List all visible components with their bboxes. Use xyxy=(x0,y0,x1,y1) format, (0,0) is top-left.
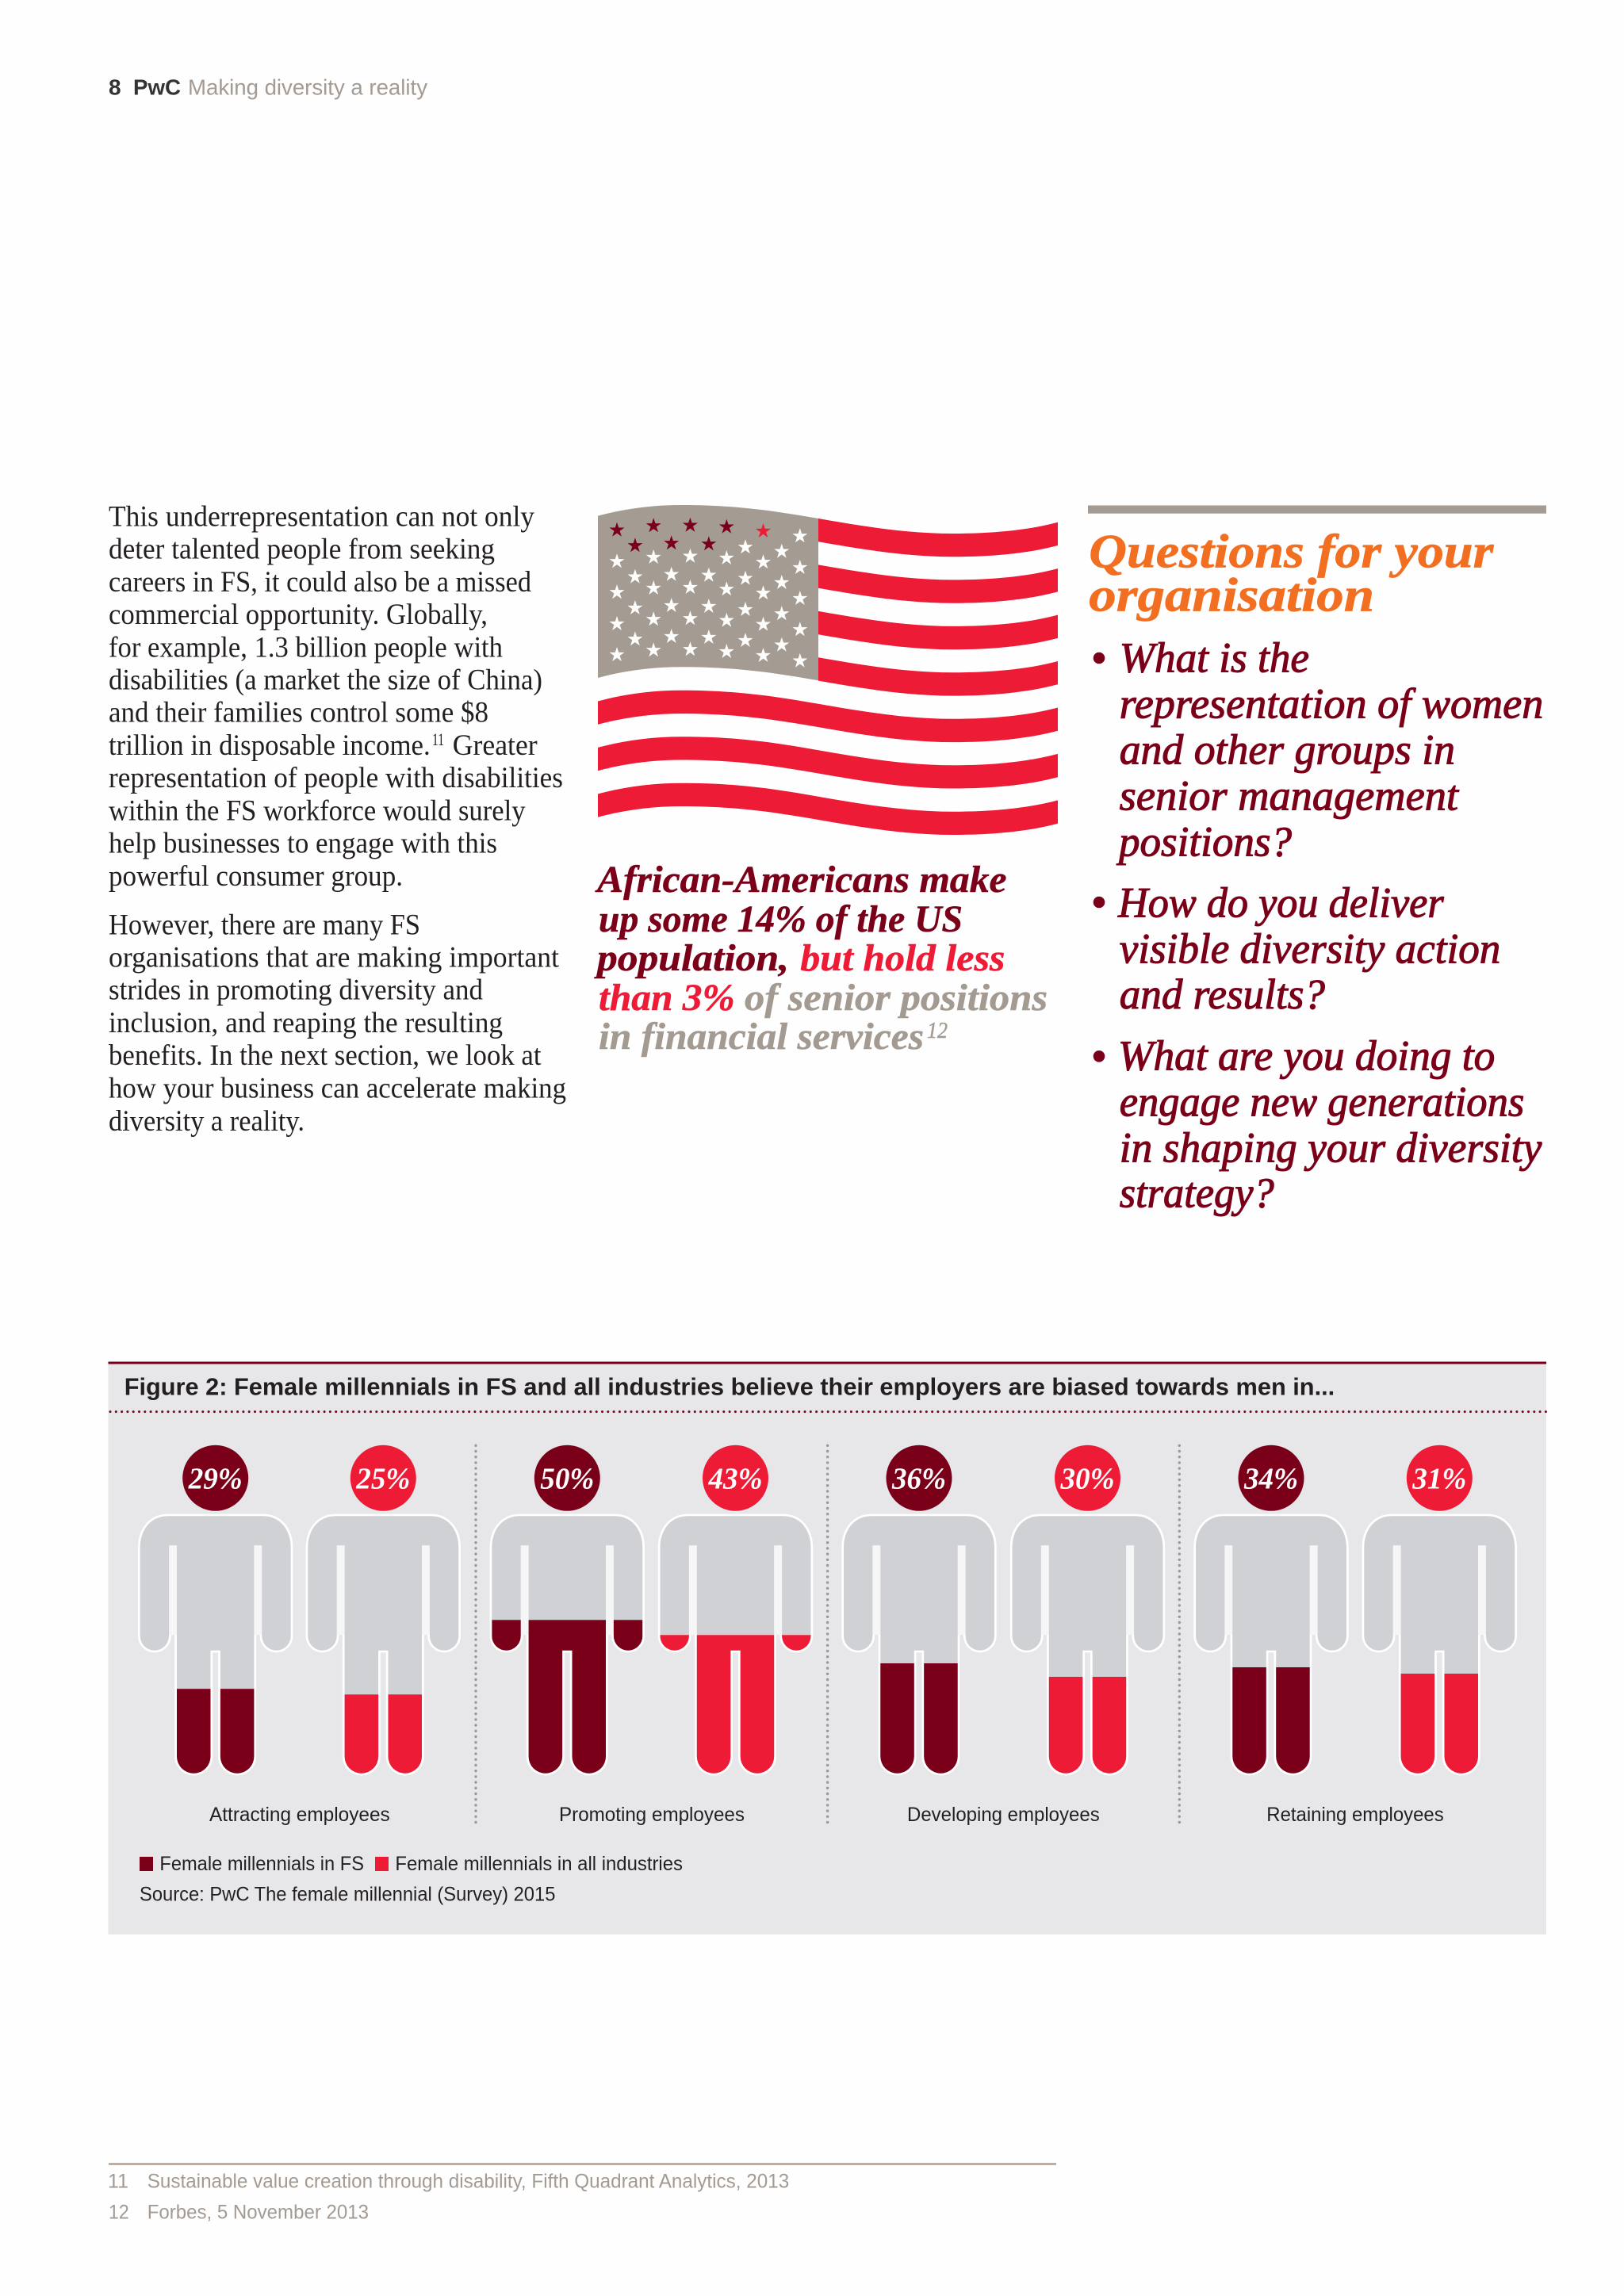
body text: second paragraph: diversity a reality. xyxy=(109,1104,304,1137)
callout: African-American statistic: African-Americans make xyxy=(595,859,1007,901)
callout: African-American statistic xyxy=(594,859,1048,1058)
pictogram: developing, all industries 30%: 30% xyxy=(1060,1462,1115,1495)
flag canton xyxy=(598,505,818,680)
body text: first paragraph: help businesses to engage with this xyxy=(109,827,497,859)
body text: first paragraph: representation of people with disabilities xyxy=(109,761,563,794)
legend: Female millennials in FS xyxy=(159,1853,364,1875)
body text: first paragraph: commercial opportunity. Globally, xyxy=(109,598,488,630)
question 3: What are you doing to xyxy=(1118,1032,1495,1080)
question 1: and other groups in xyxy=(1120,726,1455,774)
body text: second paragraph: benefits. In the next section, we look at xyxy=(109,1039,541,1071)
callout: African-American statistic: 12 xyxy=(927,1018,948,1043)
question 1: positions? xyxy=(1116,817,1292,865)
body text: second paragraph: inclusion, and reaping the resulting xyxy=(109,1006,503,1039)
pictogram: promoting, all industries 43%: 43% xyxy=(708,1462,763,1495)
category labels: Promoting employees xyxy=(559,1804,745,1826)
callout: African-American statistic: in financial services xyxy=(599,1016,924,1058)
icon: waving US flag xyxy=(598,505,1058,835)
callout: African-American statistic: than 3% xyxy=(599,977,735,1019)
question 1: senior management xyxy=(1120,772,1460,820)
body text: first paragraph: for example, 1.3 billion people with xyxy=(109,630,503,663)
callout: African-American statistic: population, xyxy=(594,937,789,979)
callout: African-American statistic: of senior positions xyxy=(745,977,1048,1019)
category labels: Attracting employees xyxy=(209,1804,390,1826)
question 1 xyxy=(1094,634,1543,865)
pictogram: attracting, all industries 25% xyxy=(304,1445,462,1789)
footnotes xyxy=(108,2163,1056,2223)
page header: Making diversity a reality xyxy=(188,75,427,100)
footnotes: 12 xyxy=(109,2201,129,2223)
pictogram: developing, all industries 30% xyxy=(1009,1445,1167,1780)
body text: second paragraph xyxy=(109,908,566,1137)
callout: African-American statistic: but hold less xyxy=(800,937,1005,979)
question 3: engage new generations xyxy=(1120,1077,1524,1125)
body text: second paragraph: organisations that are making important xyxy=(109,940,559,974)
pictogram: attracting, FS 29%: 29% xyxy=(188,1462,243,1495)
flag red stripes xyxy=(598,519,1058,835)
pictogram: attracting, FS 29% xyxy=(136,1445,295,1784)
pictogram: retaining, all industries 31% xyxy=(1360,1445,1519,1785)
panel top rule xyxy=(1088,506,1546,514)
body text: first paragraph: within the FS workforce would surely xyxy=(109,794,526,826)
source note: Source: PwC The female millennial (Survey) 2015 xyxy=(140,1884,555,1906)
flag stars xyxy=(609,518,807,668)
panel: figure 2 xyxy=(108,1362,1546,1934)
question 1: What is the xyxy=(1120,634,1309,682)
body text: second paragraph: However, there are many FS xyxy=(109,908,420,940)
pictogram: retaining, FS 34%: 34% xyxy=(1243,1462,1298,1495)
pictogram: promoting, all industries 43% xyxy=(657,1445,815,1785)
figure title: Figure 2: Female millennials in FS and all industries believe their employers are biased towards men in... xyxy=(124,1372,1335,1400)
footnotes: 11 xyxy=(108,2170,128,2192)
footnotes: Sustainable value creation through disability, Fifth Quadrant Analytics, 2013 xyxy=(147,2170,789,2192)
question 1: representation of women xyxy=(1120,680,1543,728)
body text: first paragraph: careers in FS, it could also be a missed xyxy=(109,565,531,598)
page header: 8 xyxy=(109,75,121,100)
footnotes: Forbes, 5 November 2013 xyxy=(147,2201,369,2223)
question 3 xyxy=(1094,1032,1542,1217)
body text: first paragraph: Greater xyxy=(453,729,538,761)
pictogram: retaining, all industries 31%: 31% xyxy=(1411,1462,1466,1495)
body text: first paragraph: trillion in disposable income. xyxy=(109,729,431,761)
question 3: strategy? xyxy=(1120,1169,1274,1217)
question 3: in shaping your diversity xyxy=(1120,1123,1542,1171)
question 2 xyxy=(1094,879,1500,1018)
body text: first paragraph: deter talented people from seeking xyxy=(109,533,495,564)
question 2: How do you deliver xyxy=(1117,879,1445,927)
body text: first paragraph: This underrepresentation can not only xyxy=(109,499,535,532)
body text: first paragraph: disabilities (a market the size of China) xyxy=(109,663,542,696)
pictogram: developing, FS 36% xyxy=(840,1445,998,1782)
questions heading xyxy=(1089,525,1494,622)
legend: Female millennials in all industries xyxy=(395,1853,683,1875)
body text: first paragraph xyxy=(109,499,563,892)
category labels: Retaining employees xyxy=(1266,1804,1444,1826)
page header: PwC xyxy=(133,75,181,100)
callout: African-American statistic: up some 14% of the US xyxy=(599,898,963,940)
category labels: Developing employees xyxy=(907,1804,1100,1826)
body text: second paragraph: how your business can accelerate making xyxy=(109,1072,566,1104)
pictogram: retaining, FS 34% xyxy=(1192,1445,1350,1786)
question 2: and results? xyxy=(1120,970,1325,1018)
body text: second paragraph: strides in promoting diversity and xyxy=(109,974,483,1006)
figure background xyxy=(108,1363,1546,1934)
body text: first paragraph: powerful consumer group. xyxy=(109,859,403,892)
pictogram: promoting, FS 50%: 50% xyxy=(540,1462,594,1495)
body text: first paragraph: and their families control some $8 xyxy=(109,696,488,729)
pictogram: developing, FS 36%: 36% xyxy=(891,1462,946,1495)
legend xyxy=(140,1853,683,1875)
pictogram: promoting, FS 50% xyxy=(488,1445,646,1786)
panel: questions for your organisation xyxy=(1088,506,1546,1217)
pictogram: attracting, all industries 25%: 25% xyxy=(355,1462,410,1495)
body text: first paragraph: 11 xyxy=(432,729,444,749)
questions heading: organisation xyxy=(1089,569,1374,622)
question 2: visible diversity action xyxy=(1120,925,1500,973)
category labels xyxy=(209,1804,1444,1826)
questions heading: Questions for your xyxy=(1089,525,1494,577)
